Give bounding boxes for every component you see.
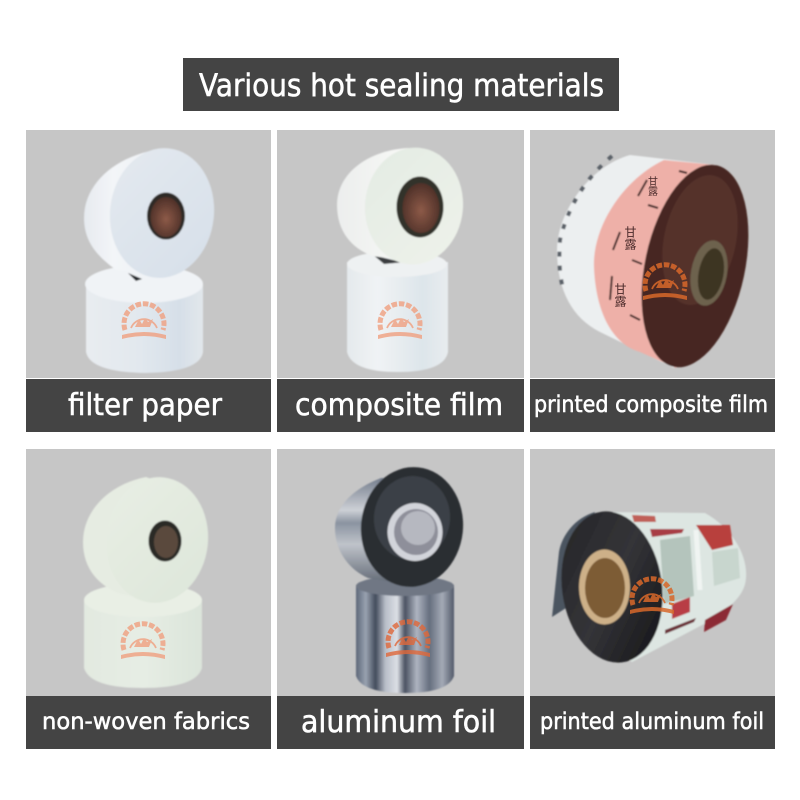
- label bar: non-woven fabrics: [26, 696, 271, 749]
- printed characters on film: 甘露: [623, 226, 637, 250]
- composite film rolls photo: [337, 143, 468, 372]
- filter paper rolls photo: [84, 143, 221, 373]
- panel: printed composite film: [530, 130, 775, 378]
- printed characters on film: 甘露: [613, 283, 627, 307]
- non-woven fabric rolls photo: [83, 472, 214, 688]
- label bar: printed composite film: printed composite film: [534, 392, 768, 418]
- label bar: aluminum foil: aluminum foil: [301, 705, 496, 740]
- title banner: [183, 58, 619, 111]
- printed composite film roll photo: [557, 155, 765, 377]
- aluminum foil rolls photo: [335, 462, 469, 693]
- label bar: composite film: composite film: [295, 388, 503, 423]
- printed characters on film: 甘露: [646, 175, 658, 197]
- label bar: printed aluminum foil: printed aluminum foil: [540, 709, 764, 735]
- panel: composite film: [277, 130, 524, 378]
- label bar: filter paper: filter paper: [68, 388, 223, 423]
- watermark logo: [122, 304, 166, 339]
- label bar: printed aluminum foil: [530, 696, 775, 749]
- label bar: filter paper: [26, 379, 271, 432]
- label bar: non-woven fabrics: non-woven fabrics: [42, 709, 250, 735]
- printed characters on film: [613, 175, 658, 307]
- panel: filter paper: [26, 130, 271, 378]
- watermark logo: [386, 622, 430, 657]
- label bar: composite film: [277, 379, 524, 432]
- watermark logo: [121, 624, 165, 659]
- label bar: printed composite film: [530, 379, 775, 432]
- panel: non-woven fabrics: [26, 449, 271, 696]
- panel: aluminum foil: [277, 449, 524, 696]
- printed marks on film edge: [559, 156, 612, 288]
- watermark logo: [630, 579, 674, 614]
- watermark logo: [643, 265, 687, 300]
- watermark logo: [378, 304, 422, 339]
- label bar: aluminum foil: [277, 696, 524, 749]
- title banner: Various hot sealing materials: [199, 68, 604, 104]
- panel: printed aluminum foil: [530, 449, 775, 696]
- printed aluminum foil roll photo: [552, 505, 746, 669]
